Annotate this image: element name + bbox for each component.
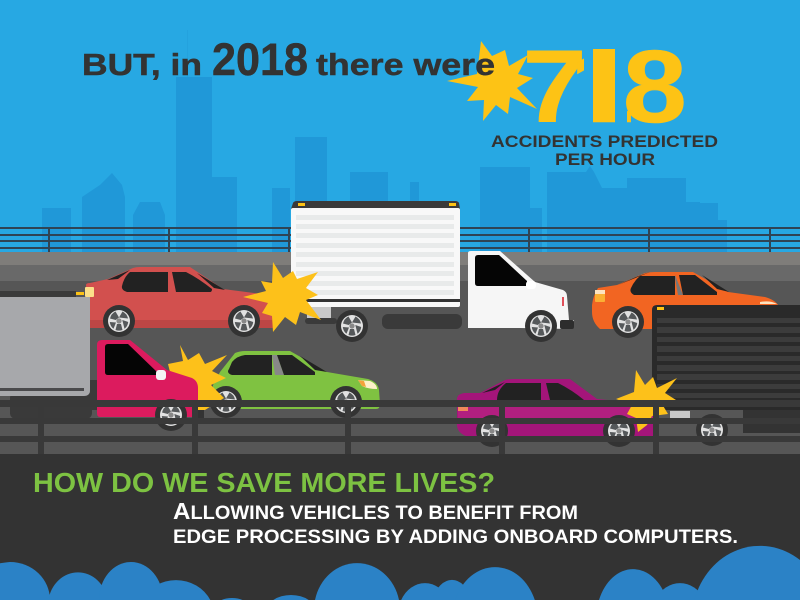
answer text: ALLOWING VEHICLES TO BENEFIT FROM <box>173 498 578 524</box>
headline: there were <box>316 47 495 82</box>
black box truck <box>652 305 800 446</box>
crash burst: magenta truck and green car <box>168 345 227 410</box>
back guard rail <box>0 227 800 252</box>
question heading: HOW DO WE SAVE MORE LIVES? <box>33 467 495 498</box>
front guard rail <box>0 400 800 456</box>
orange car <box>592 272 778 338</box>
clouds <box>0 546 800 600</box>
purple car front wheel <box>603 415 635 447</box>
cab <box>468 251 574 329</box>
gray box truck <box>0 291 100 419</box>
purple car <box>457 379 655 447</box>
white box truck <box>291 201 574 342</box>
accidents predicted caption <box>491 132 718 169</box>
headline: 2018 <box>212 34 308 85</box>
big number 718 <box>522 30 687 145</box>
headline: BUT, in <box>82 47 202 82</box>
headline <box>82 34 495 85</box>
green car <box>210 351 380 418</box>
red car <box>85 267 274 337</box>
crash burst: red car and white truck <box>243 262 321 332</box>
magenta truck cab <box>97 340 204 431</box>
burst behind 718 <box>447 41 537 121</box>
answer text <box>173 498 738 548</box>
crash burst: purple car and black truck <box>616 370 677 432</box>
background: sky <box>0 0 800 253</box>
big number 718: 71 <box>522 30 634 145</box>
accidents predicted caption: PER HOUR <box>555 150 655 169</box>
answer text: EDGE PROCESSING BY ADDING ONBOARD COMPUTERS. <box>173 527 738 548</box>
big number 718: 8 <box>623 30 687 145</box>
accidents predicted caption: ACCIDENTS PREDICTED <box>491 132 718 151</box>
road <box>0 252 800 455</box>
bottom dark panel <box>0 454 800 600</box>
skyline silhouette <box>42 30 727 252</box>
